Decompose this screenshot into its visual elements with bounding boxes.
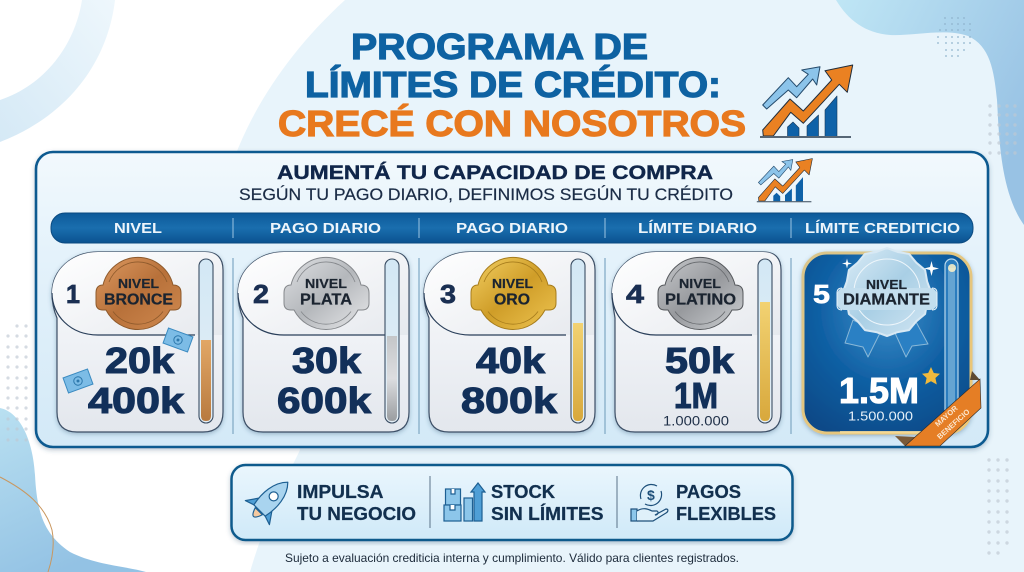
text: pagos flexibles: PAGOS [676, 482, 741, 502]
text: stock sin limites [491, 482, 604, 524]
card: nivel plata: 2 [253, 279, 269, 309]
text: stock sin limites: SIN LÍMITES [491, 503, 604, 524]
header bar: LÍMITE CREDITICIO [805, 220, 960, 237]
medal: diamante [837, 248, 937, 357]
panel: main [36, 152, 988, 447]
subheading: SEGÚN TU PAGO DIARIO, DEFINIMOS SEGÚN TU CRÉDITO [239, 185, 733, 204]
card: nivel bronce: 1 [66, 279, 80, 309]
progress bar [199, 259, 213, 423]
medal: plata: PLATA [300, 292, 352, 308]
icon: growth chart large [760, 65, 853, 138]
card: nivel platino: 1.000.000 [663, 414, 729, 428]
title: PROGRAMA DE [351, 26, 648, 67]
medal: platino: NIVEL [679, 276, 721, 291]
card: nivel plata: 30k [292, 340, 362, 381]
card: nivel bronce: 20k [105, 340, 175, 381]
ribbon: mayor beneficio [895, 371, 981, 446]
medal: bronce: NIVEL [118, 276, 159, 291]
ribbon: mayor beneficio: MAYOR [933, 403, 960, 429]
card: nivel oro: 800k [461, 380, 558, 421]
header bar: PAGO DIARIO [270, 221, 381, 237]
card: nivel bronce [52, 252, 223, 432]
header bar: NIVEL [114, 221, 162, 237]
icon: stock boxes [444, 483, 485, 521]
icon: growth chart small [757, 158, 812, 202]
card: nivel platino: 1M [674, 375, 718, 416]
medal: diamante: NIVEL [866, 277, 907, 292]
card: nivel platino [612, 252, 781, 432]
medal: plata: NIVEL [305, 276, 347, 291]
text: stock sin limites: STOCK [491, 482, 555, 502]
icon: money [63, 369, 93, 393]
medal: plata [284, 257, 369, 330]
medal: bronce: BRONCE [104, 292, 173, 308]
title [278, 26, 746, 144]
icon: money hand [631, 484, 668, 521]
card: nivel diamante: 5 [813, 279, 830, 309]
medal: platino: PLATINO [665, 292, 736, 308]
medal: platino [658, 257, 743, 330]
sparkles [842, 258, 939, 276]
card: nivel platino: 4 [626, 279, 645, 309]
medal: diamante: DIAMANTE [843, 292, 930, 308]
card: nivel bronce: 400k [88, 380, 185, 421]
medal: bronce [96, 257, 181, 330]
card: nivel diamante: 1.500.000 [848, 408, 913, 424]
card: nivel oro [424, 252, 595, 432]
medal: oro [471, 257, 556, 330]
text: impulsa tu negocio [297, 482, 416, 524]
card: nivel diamante [803, 248, 981, 446]
text: impulsa tu negocio: TU NEGOCIO [297, 504, 416, 524]
card: nivel oro: 3 [440, 279, 456, 309]
card: nivel platino: 50k [665, 340, 735, 381]
icon: star [922, 367, 940, 384]
text: impulsa tu negocio: IMPULSA [297, 482, 384, 502]
footnote: Sujeto a evaluación crediticia interna y cumplimiento. Válido para clientes registrados. [285, 551, 739, 565]
header bar [51, 213, 973, 243]
progress bar [945, 259, 958, 429]
header bar: PAGO DIARIO [456, 221, 568, 237]
ribbon: mayor beneficio: BENEFICIO [935, 407, 972, 441]
header bar: LÍMITE DIARIO [638, 220, 757, 237]
card: nivel plata: 600k [277, 380, 372, 421]
icon: money [163, 328, 193, 352]
text: pagos flexibles: FLEXIBLES [676, 504, 776, 524]
icon: rocket [241, 470, 300, 529]
card: nivel plata [238, 252, 409, 432]
heading: AUMENTÁ TU CAPACIDAD DE COMPRA [277, 162, 713, 184]
text: pagos flexibles [676, 482, 776, 524]
icon: money hand: $ [647, 487, 655, 503]
title: CRECÉ CON NOSOTROS [278, 103, 746, 144]
card: nivel diamante: 1.5M [839, 370, 919, 411]
card: nivel oro: 40k [476, 340, 546, 381]
title: LÍMITES DE CRÉDITO: [305, 64, 721, 105]
medal: oro: ORO [494, 292, 530, 308]
medal: oro: NIVEL [492, 276, 533, 291]
panel: benefits [232, 465, 792, 540]
